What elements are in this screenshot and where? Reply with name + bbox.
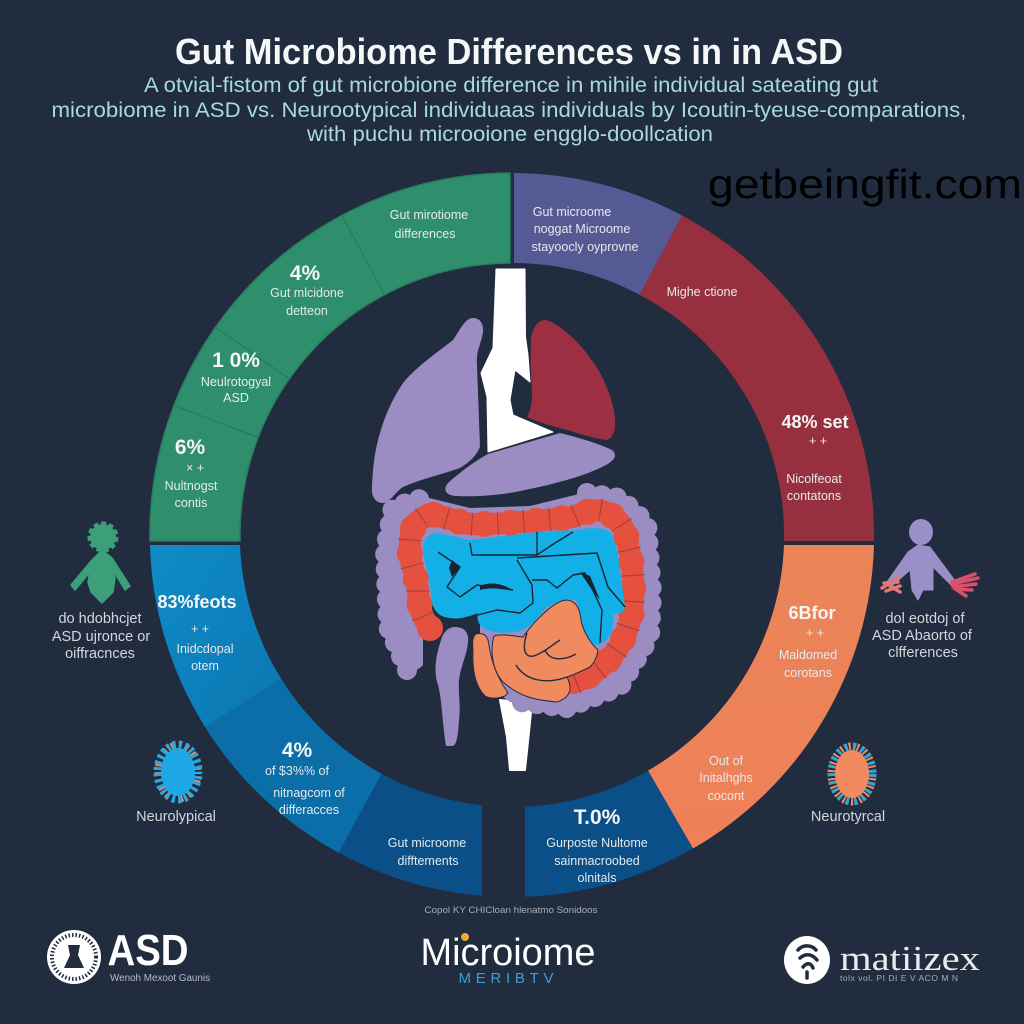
label: left person: do hdobhcjet	[58, 611, 142, 627]
segment: green 10%: Neulrotogyal	[201, 375, 271, 389]
segment: green 10%: 1 0%	[212, 349, 260, 372]
segment: red lower: 48% set	[781, 412, 849, 432]
label: left person: oiffracnces	[65, 646, 135, 662]
icon: purple person	[882, 519, 978, 600]
segment: green 4%: detteon	[286, 304, 328, 318]
segment: orange upper: Initalhghs	[699, 771, 753, 785]
segment: dark blue right	[525, 771, 693, 897]
left microbe	[136, 745, 216, 825]
segment: bright blue: 83%feots	[157, 592, 237, 612]
label: neurotypical right: Neurotyrcal	[811, 809, 885, 825]
label: left person	[52, 611, 150, 662]
label: left person: ASD ujronce or	[52, 629, 150, 645]
icon: blue microbe	[158, 745, 198, 799]
logo: matiizex: tolx vol. PI DI E V ACO M N	[840, 973, 958, 983]
segment: bright blue: otem	[191, 659, 219, 673]
label: right person: ASD Abaorto of	[872, 628, 973, 644]
logo: ASD: Wenoh Mexoot Gaunis	[110, 973, 210, 984]
label: neurotypical left: Neurolypical	[136, 809, 216, 825]
segment: green 4%	[216, 215, 384, 379]
segment: green top: Gut mirotiome	[390, 208, 468, 222]
segment: bright blue: + +	[191, 622, 209, 636]
ring chart	[150, 173, 874, 897]
logo: ASD	[47, 926, 210, 984]
segment: purple top: stayoocly oyprovne	[531, 240, 639, 254]
subtitle: with puchu microoione engglo-doollcation	[306, 123, 713, 146]
segment: green 10%: ASD	[223, 391, 249, 405]
left group: ASD person	[52, 523, 150, 662]
segment: green 6%	[150, 405, 258, 541]
segment: mid blue: differacces	[279, 803, 339, 817]
icon: ASD seal	[47, 930, 101, 984]
segment: purple top	[514, 173, 682, 295]
logo: Microbiome: MERIBTV	[458, 970, 554, 987]
icon: green person	[71, 523, 130, 603]
segment: dark blue right: olnitals	[578, 871, 616, 885]
logo: Microbiome: Microiome	[420, 932, 596, 974]
icon: matiizex emblem	[784, 936, 830, 984]
segment: green top: differences	[395, 227, 455, 241]
segment: green 4%: Gut mlcidone	[270, 286, 344, 300]
icon: orange microbe	[832, 747, 872, 801]
subtitle: microbiome in ASD vs. Neurootypical individuaas individuals by Icoutin-tyeuse-comparations,	[52, 99, 966, 122]
segment: orange upper: corotans	[784, 666, 832, 680]
organ: bottom white tube	[500, 700, 532, 770]
segment: green 4%: 4%	[290, 262, 320, 285]
segment: purple top: noggat Microome	[534, 222, 630, 236]
icon: orange dot	[461, 933, 469, 941]
segment: orange upper: cocont	[708, 789, 745, 803]
title: Gut Microbiome Differences vs in in ASD	[175, 31, 843, 72]
segment: orange upper: Maldomed	[779, 648, 837, 662]
segment: dark blue right: Gurposte Nultome	[546, 836, 648, 850]
subtitle: A otvial-fistom of gut microbione difference in mihile individual sateating gut	[144, 74, 878, 97]
segment: green top	[342, 173, 510, 295]
footer caption: Copol KY CHICloan hlenatmo Sonidoos	[424, 905, 598, 915]
organ: orange loops	[473, 600, 598, 702]
segment: mid blue: nitnagcom of	[273, 786, 345, 800]
organ: outer bumpy colon	[385, 492, 655, 710]
logo: matiizex: matiizex	[840, 939, 981, 978]
segment: red lower: Nicolfeoat	[786, 472, 842, 486]
organ: rectum	[435, 627, 468, 746]
logo: matiizex	[784, 936, 981, 984]
organ: left lung	[372, 318, 483, 503]
label: right person	[872, 611, 973, 661]
segment: dark blue bottom	[339, 774, 482, 896]
segment: mid blue: 4%	[282, 739, 312, 762]
segment: orange upper: Out of	[709, 754, 744, 768]
subtitle	[52, 74, 966, 146]
segment: bright blue	[150, 545, 281, 727]
organ: liver	[445, 433, 615, 496]
segment: orange upper: + +	[806, 626, 824, 640]
segment: red lower: contatons	[787, 489, 841, 503]
organ: large intestine	[410, 510, 633, 683]
watermark: getbeingfit.com	[708, 161, 1022, 207]
segment: red lower	[735, 327, 874, 541]
logo: ASD: ASD	[108, 926, 188, 975]
segment: red lower: + +	[809, 434, 827, 448]
segment: green 6%: × +	[186, 461, 204, 475]
segment: green 6%: contis	[175, 496, 207, 510]
segment: red upper	[640, 215, 808, 379]
segment: dark blue right: T.0%	[574, 806, 621, 829]
icon: digestive system	[372, 269, 655, 770]
segment: orange upper	[648, 545, 874, 848]
organ: esophagus and trachea	[481, 269, 553, 452]
label: right person: dol eotdoj of	[885, 611, 965, 627]
segment: purple top: Gut microome	[533, 205, 611, 219]
right group: person with microbes	[872, 519, 978, 661]
segment: green 6%: Nultnogst	[165, 479, 218, 493]
organ: right lung	[527, 320, 615, 440]
segment: bright blue: Inidcdopal	[176, 642, 234, 656]
segment: mid blue	[205, 679, 382, 853]
label: right person: clfferences	[888, 645, 958, 661]
segment: red upper: Mighe ctione	[667, 285, 737, 299]
segment: orange upper: 6Bfor	[788, 603, 836, 623]
right microbe	[811, 747, 885, 825]
segment: dark blue bottom: Gut microome	[388, 836, 466, 850]
organ: small intestine	[423, 528, 625, 646]
segment: green 10%	[174, 327, 289, 438]
segment: dark blue right: sainmacroobed	[554, 854, 640, 868]
segment: mid blue: of $3%% of	[265, 764, 329, 778]
segment: dark blue bottom: difftements	[398, 854, 458, 868]
segment: green 6%: 6%	[175, 436, 205, 459]
